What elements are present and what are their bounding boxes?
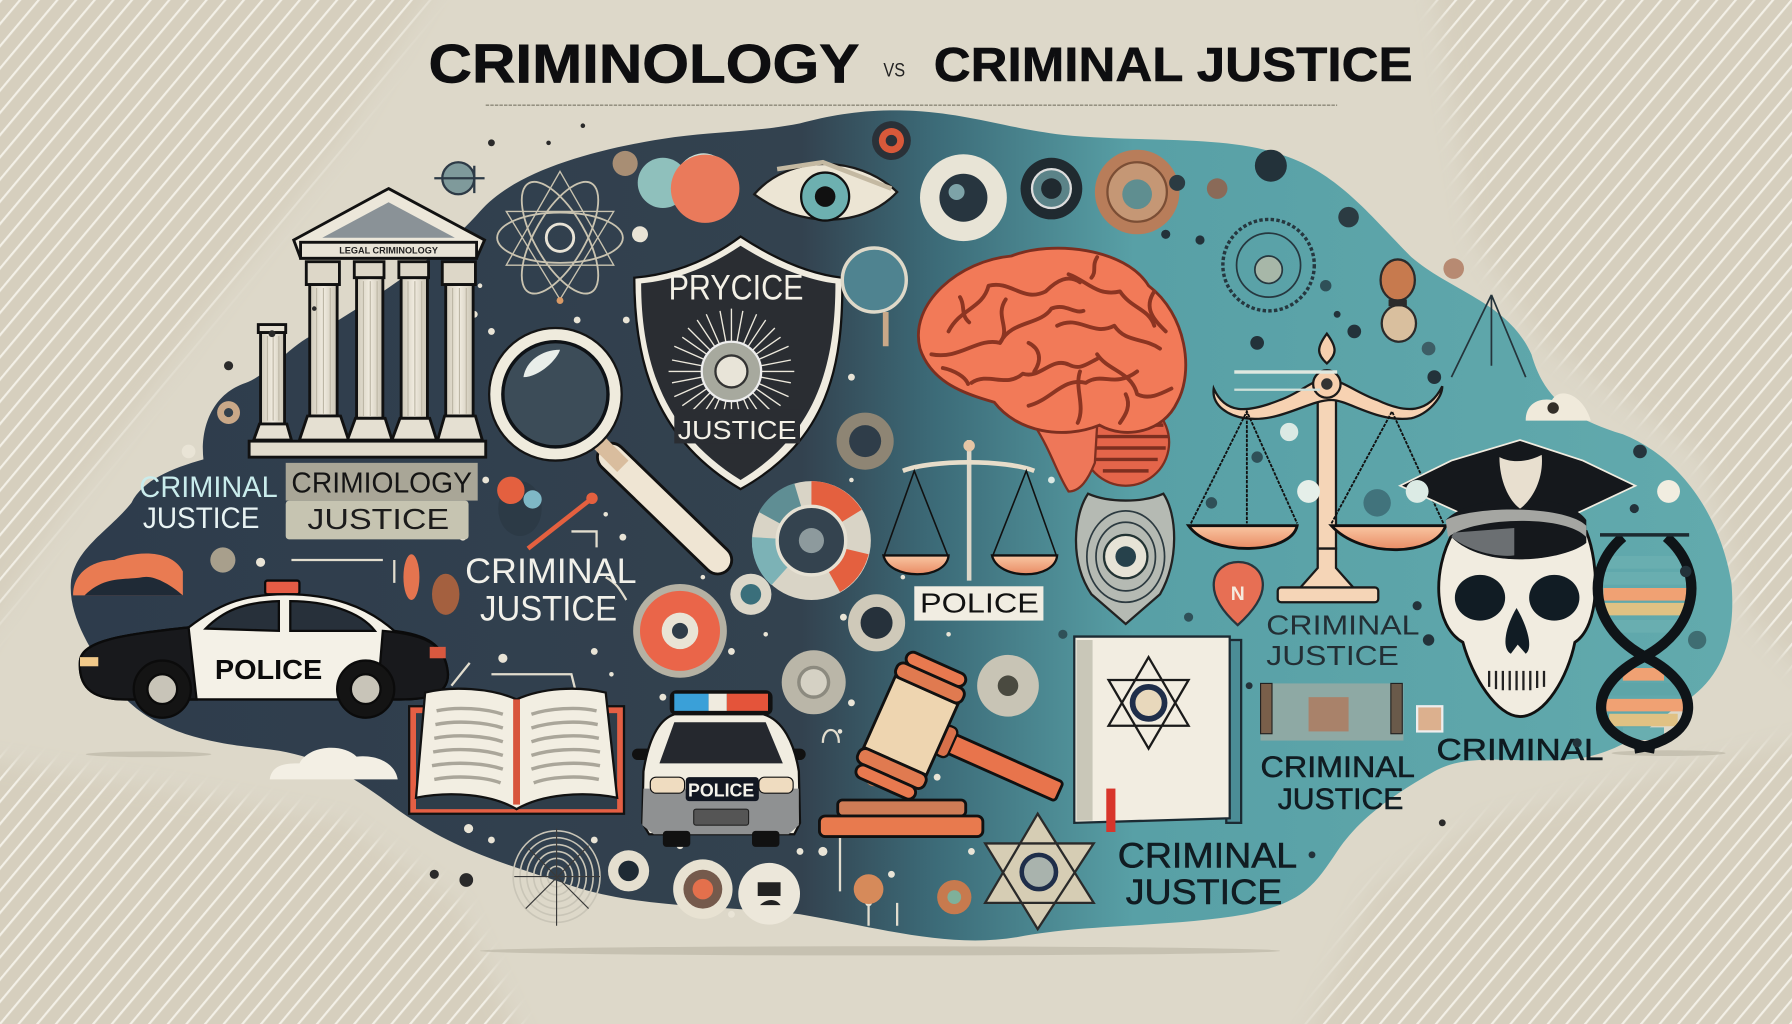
label: criminal justice, white: CRIMINAL [139,471,278,504]
magnifying glass [489,328,718,560]
central background blob [71,110,1732,940]
label: criminal justice, dark top [1266,609,1419,671]
ground shadows [86,750,1726,955]
gavel sound block [819,800,983,837]
title: CRIMINAL JUSTICE [934,39,1413,92]
columns [299,262,482,440]
label: criminal: CRIMINAL [1437,732,1603,767]
police car front view: POLICE [688,780,754,801]
fingerprint [513,829,600,926]
spheres top [613,151,739,223]
circle icons top [837,121,1179,470]
label: criminal justice, dark bottom: JUSTICE [1126,872,1282,912]
label: police plaque: POLICE [920,588,1039,619]
label: criminal justice, dark top: CRIMINAL [1266,609,1419,640]
book with star [1074,637,1241,832]
police shield badge: PRYCICE [669,267,803,307]
label: criminal justice, dark bottom: CRIMINAL [1118,835,1297,875]
specks outside blob [224,123,1446,887]
small machine panel [1261,683,1442,741]
title: VS [883,60,905,82]
teardrop pin [1214,562,1263,625]
pediment [294,189,485,258]
small column [254,325,291,440]
open book [409,689,624,814]
icon: eye [754,162,897,221]
label: criminal justice, white centre [465,551,637,629]
police car side view [80,581,448,718]
small decorative glyphs, left [182,226,975,926]
temple [249,189,486,457]
icon: atom [497,171,623,305]
police car front view [632,690,806,847]
label: criminology justice plaques: JUSTICE [307,504,449,536]
base slab [249,441,486,457]
skull with police cap [1400,440,1635,717]
label: criminal justice, dark middle: CRIMINAL [1261,751,1415,784]
label: criminology justice plaques: CRIMIOLOGY [291,468,472,500]
police car side view: POLICE [215,654,322,685]
DNA helix [1598,535,1691,749]
teardrop pin: N [1231,583,1245,605]
temple: LEGAL CRIMINOLOGY [339,246,438,256]
icon: small device top left [434,162,485,194]
star badge [985,814,1094,929]
title: CRIMINOLOGY [429,32,859,94]
label: criminal justice, white: JUSTICE [143,502,259,535]
label: criminal justice, dark middle [1261,751,1415,816]
label: criminal justice, white centre: JUSTICE [480,589,617,629]
column flutes [267,281,466,421]
title [429,32,1413,105]
label: criminal justice, white [139,471,278,535]
label: criminal justice, white centre: CRIMINAL [465,551,637,591]
icon: hills [73,553,183,595]
circle tokens middle [608,481,1039,925]
police shield badge [634,237,842,489]
gavel [850,648,1087,854]
icon: line-art seal [1223,219,1314,311]
police shield badge: JUSTICE [678,415,797,445]
police badge centre right [1076,494,1174,624]
icon: cloud left [270,748,398,779]
brain [918,248,1186,491]
label: criminal justice, dark top: JUSTICE [1266,640,1399,671]
small icons, right [1048,150,1706,858]
large scales [1189,334,1446,602]
cap [1400,440,1635,514]
label: criminal justice, dark middle: JUSTICE [1278,783,1403,816]
label: criminal justice, dark bottom [1118,835,1297,912]
small scales [883,440,1057,581]
label: criminology justice plaques [286,463,478,539]
ball and stick icon [497,477,598,549]
